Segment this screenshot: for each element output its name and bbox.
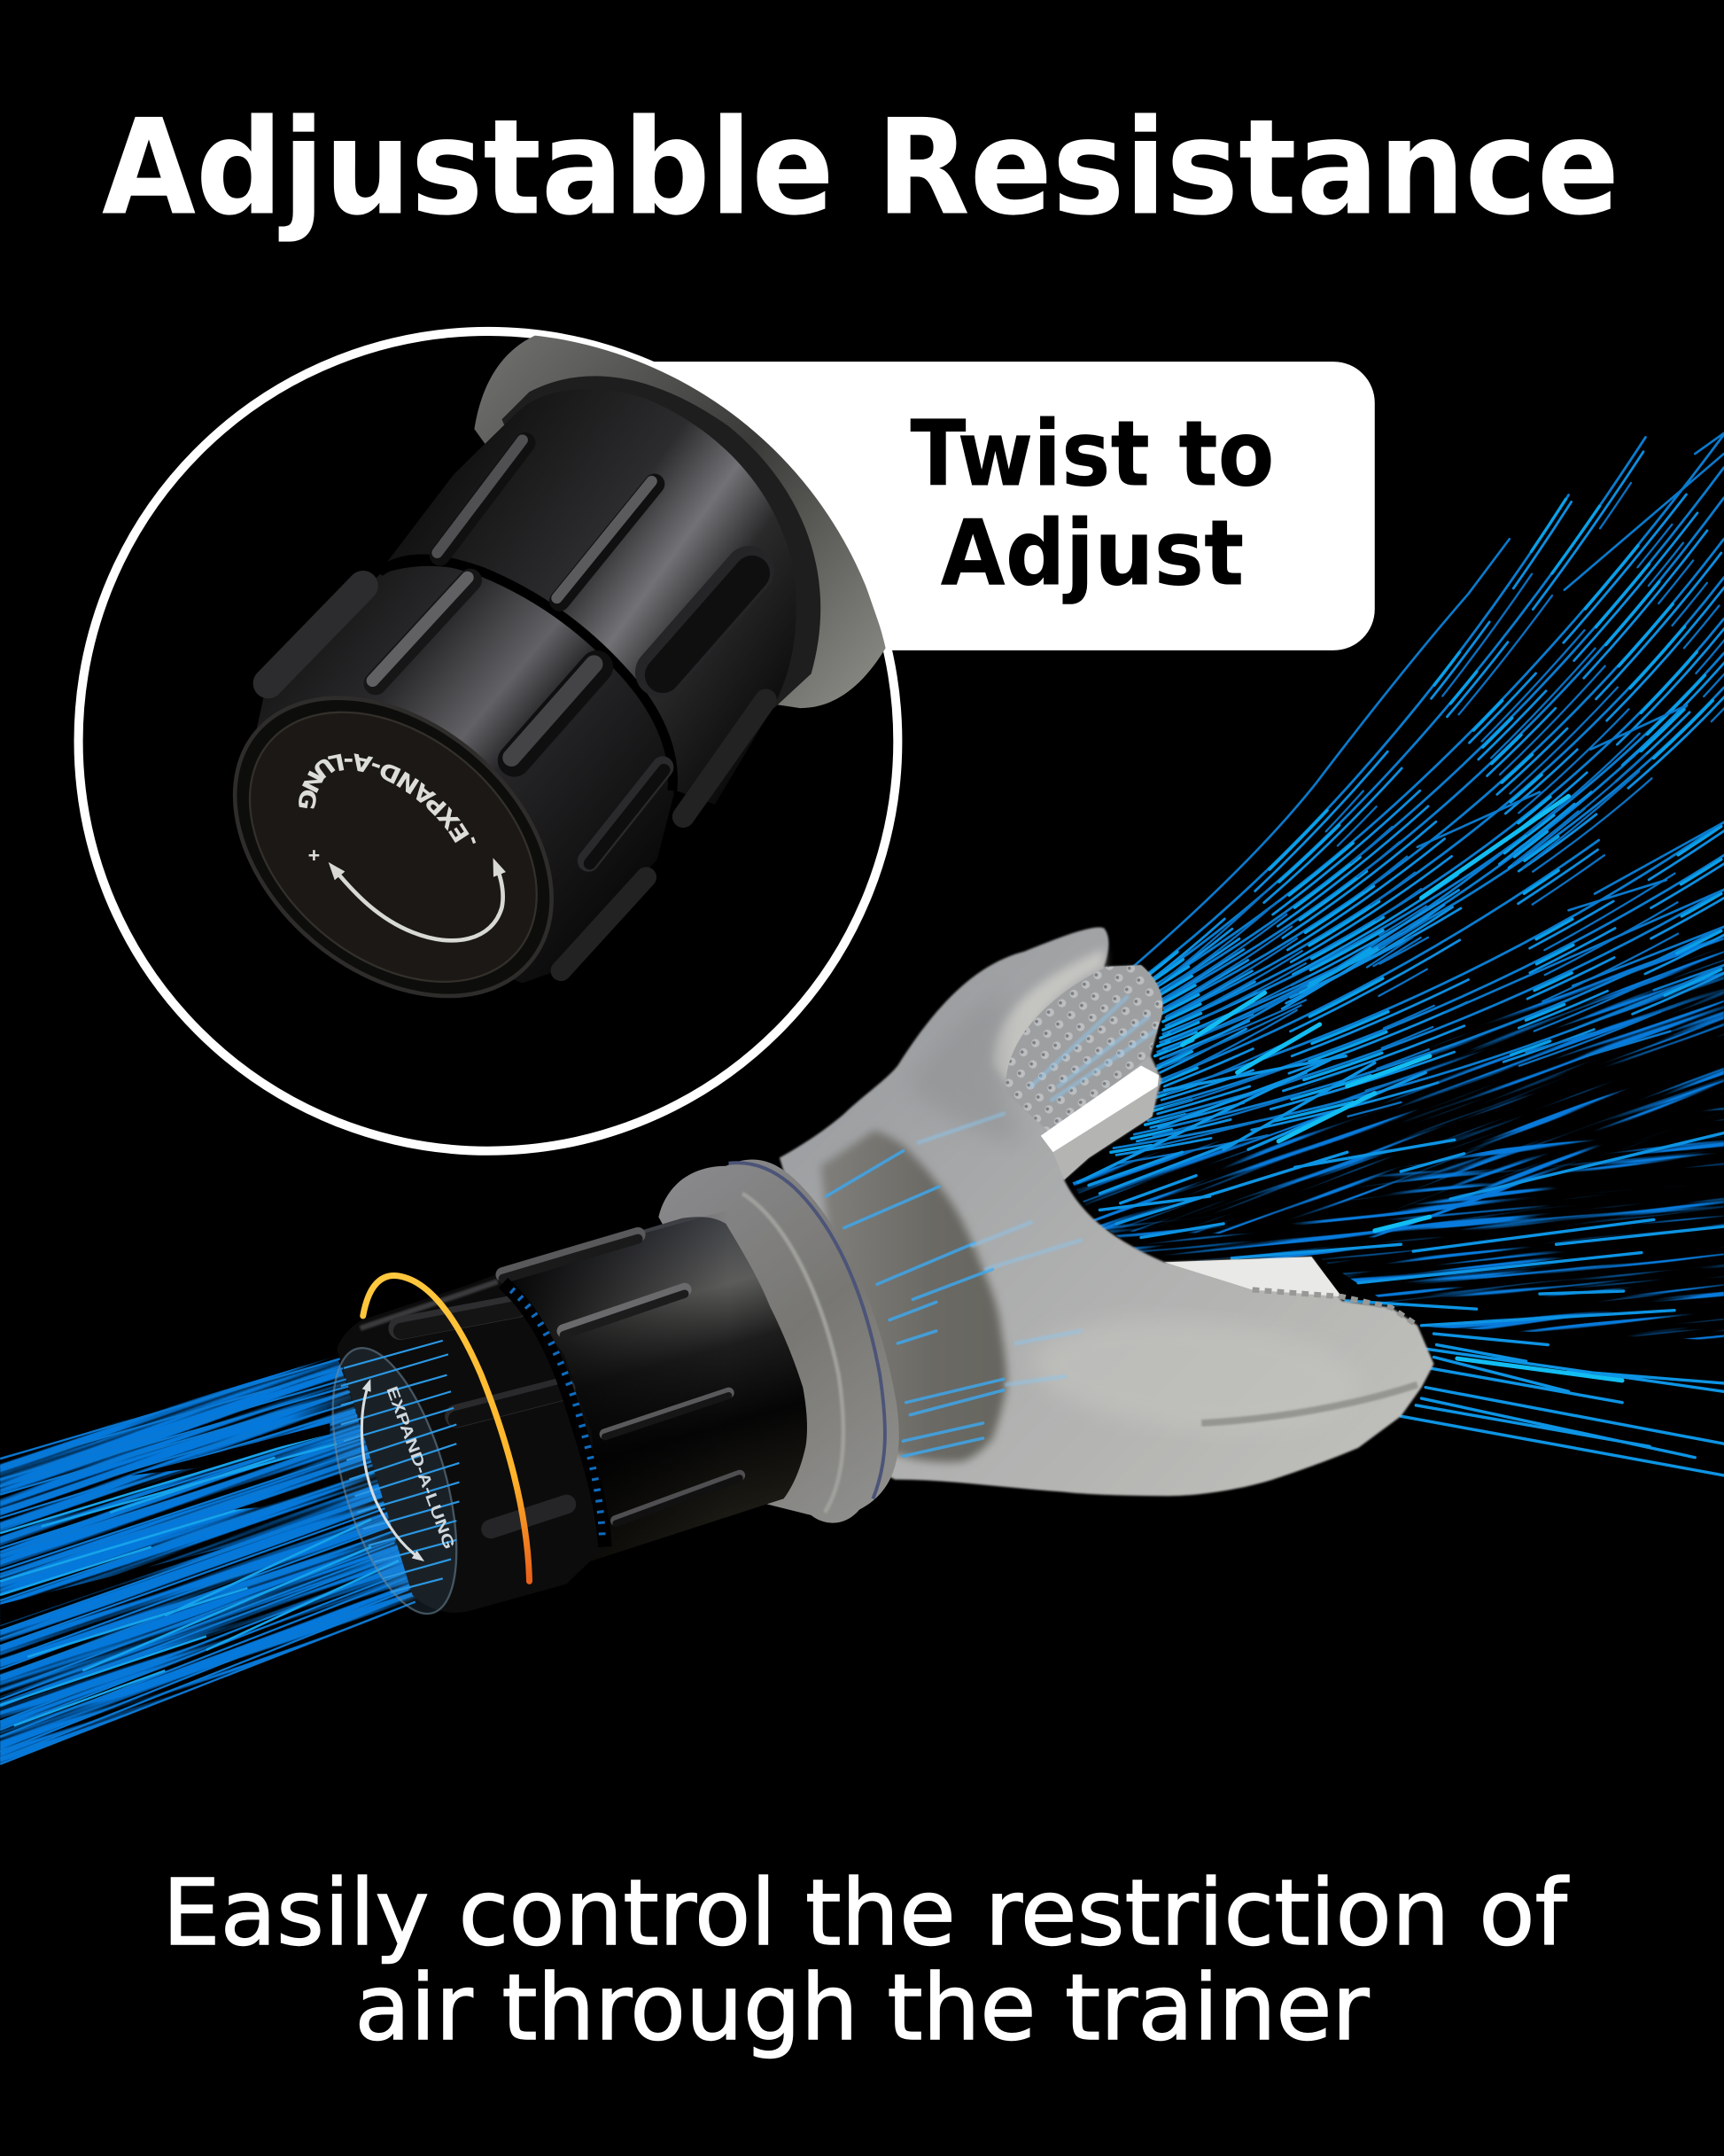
black cylinder rear section: [503, 1217, 807, 1575]
dial arrow: [334, 867, 503, 940]
rear section shadow fade: [503, 1210, 728, 1575]
air stream: right side fan: [1072, 432, 1724, 1477]
dial brand text: [299, 754, 470, 842]
knob ridges: [268, 440, 765, 970]
lower teeth grip: [1253, 1289, 1417, 1326]
front section top highlight: [361, 1281, 498, 1328]
under strip lip: [1053, 1086, 1158, 1179]
face brand text: EXPAND-A-LUNG: [383, 1384, 458, 1552]
caption: Easily control the restriction of: [162, 1861, 1569, 1966]
dial plus sign: +: [308, 844, 320, 867]
callout text: Adjust: [940, 501, 1244, 606]
soft air glow past band: [919, 997, 1155, 1385]
ring crease: [742, 1194, 843, 1513]
dial minus sign: -: [461, 831, 490, 848]
blue-tinted seam: [728, 1163, 885, 1498]
title: Adjustable Resistance: [102, 92, 1619, 245]
section gap blue glints: [511, 1289, 602, 1540]
orange rotation ring: [363, 1276, 529, 1581]
lower lobe highlight: [1027, 1306, 1365, 1444]
dial end cap: EXPAND-A-LUNG: [299, 753, 470, 844]
air stream: left side band: [0, 1356, 416, 1765]
silicone flange: [474, 330, 887, 708]
upper teeth grip: [1006, 965, 1162, 1136]
face arrow: [361, 1385, 419, 1558]
caption: air through the trainer: [354, 1956, 1370, 2061]
dial end cap: [232, 697, 554, 998]
rear knob section: [379, 389, 796, 805]
body ridges: [400, 1234, 740, 1529]
inset circle: resistance dial close-up: [74, 326, 902, 1156]
inner tube dark band: [820, 1130, 1006, 1462]
mouthpiece trainer device: [307, 928, 1433, 1627]
black cylinder front section: [337, 1272, 605, 1613]
flange rings: [658, 1159, 899, 1523]
section gap with blue air: [503, 1283, 605, 1547]
upper white strip: [1041, 1066, 1159, 1152]
mouthpiece body: [780, 928, 1433, 1496]
upper lobe shadow: [907, 990, 1024, 1141]
upper lip shading: [992, 949, 1104, 1086]
callout text: Twist to: [910, 402, 1274, 508]
blue air inside mouthpiece: [827, 1151, 1004, 1456]
front knob section: [256, 566, 673, 983]
gap between knob sections: [379, 559, 672, 790]
translucent front face: [307, 1335, 481, 1627]
callout: twist to adjust: [591, 362, 1375, 650]
crease line: [1201, 1385, 1417, 1423]
lower white tab: [1164, 1257, 1342, 1296]
